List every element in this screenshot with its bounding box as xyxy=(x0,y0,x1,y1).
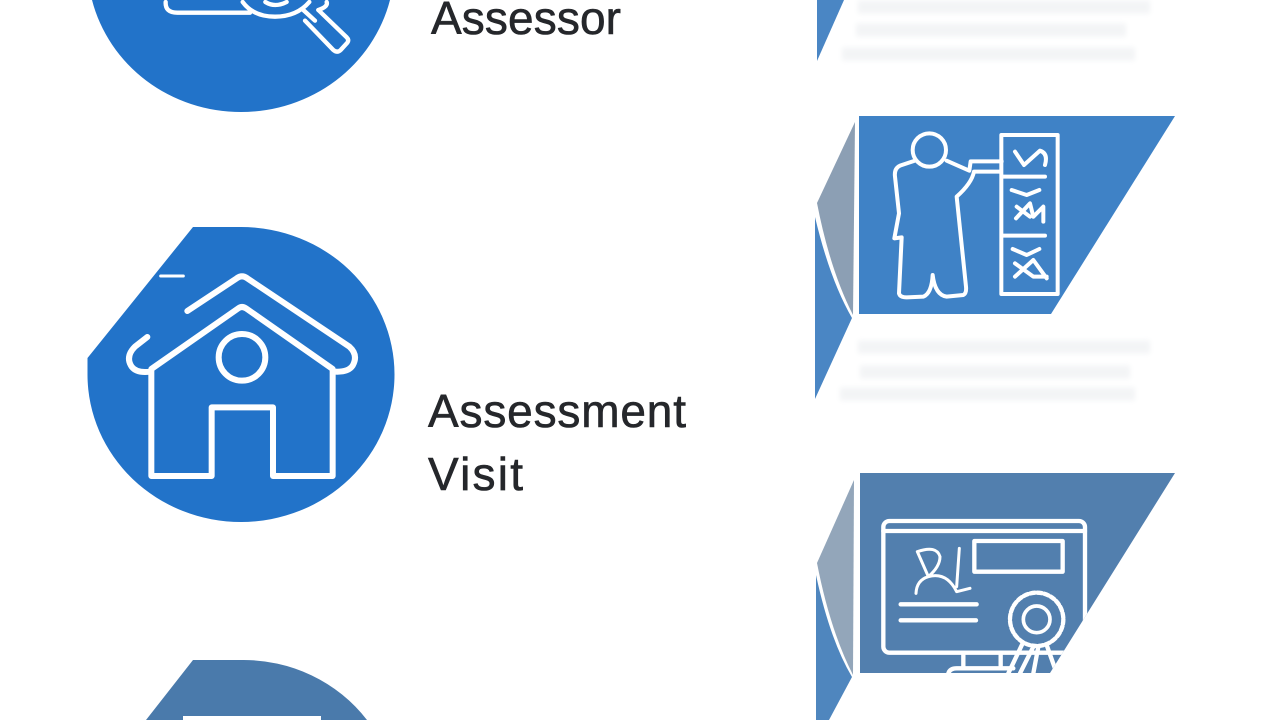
label: Assessment Visit: Visit xyxy=(428,448,523,500)
icon: monitor with certificate and rosette xyxy=(883,521,1085,673)
step 2: assessment visit circle icon xyxy=(88,227,394,522)
step 3: circle icon, cropped at bottom edge xyxy=(146,660,367,720)
label: Assessment Visit: Assessment xyxy=(428,385,686,437)
panel 3: faded illegible caption xyxy=(858,700,1150,712)
panel 1: wedge fragment xyxy=(817,0,844,61)
icon: magnifying glass over card xyxy=(166,2,348,52)
panel 3: certificate card xyxy=(816,473,1175,720)
side wedge: blue xyxy=(816,575,852,720)
side wedge: blue xyxy=(815,217,852,399)
icon: top of white shape xyxy=(183,716,321,720)
icon: person pointing at checklist xyxy=(894,133,1058,297)
panel 2: checklist card xyxy=(815,116,1175,399)
panel 2: faded illegible caption xyxy=(840,347,1150,394)
card background xyxy=(859,116,1175,314)
panel 1: faded illegible caption xyxy=(842,7,1150,54)
side wedge: gray xyxy=(817,122,855,315)
circle background with cut corner xyxy=(88,227,394,522)
side wedge: gray xyxy=(817,480,854,675)
label: Assessment Visit xyxy=(428,385,686,500)
circle background with cut corner xyxy=(146,660,367,720)
card background xyxy=(860,473,1175,673)
circle background xyxy=(92,0,390,112)
step 1: assessor circle icon xyxy=(92,0,390,112)
icon: house xyxy=(129,276,355,476)
